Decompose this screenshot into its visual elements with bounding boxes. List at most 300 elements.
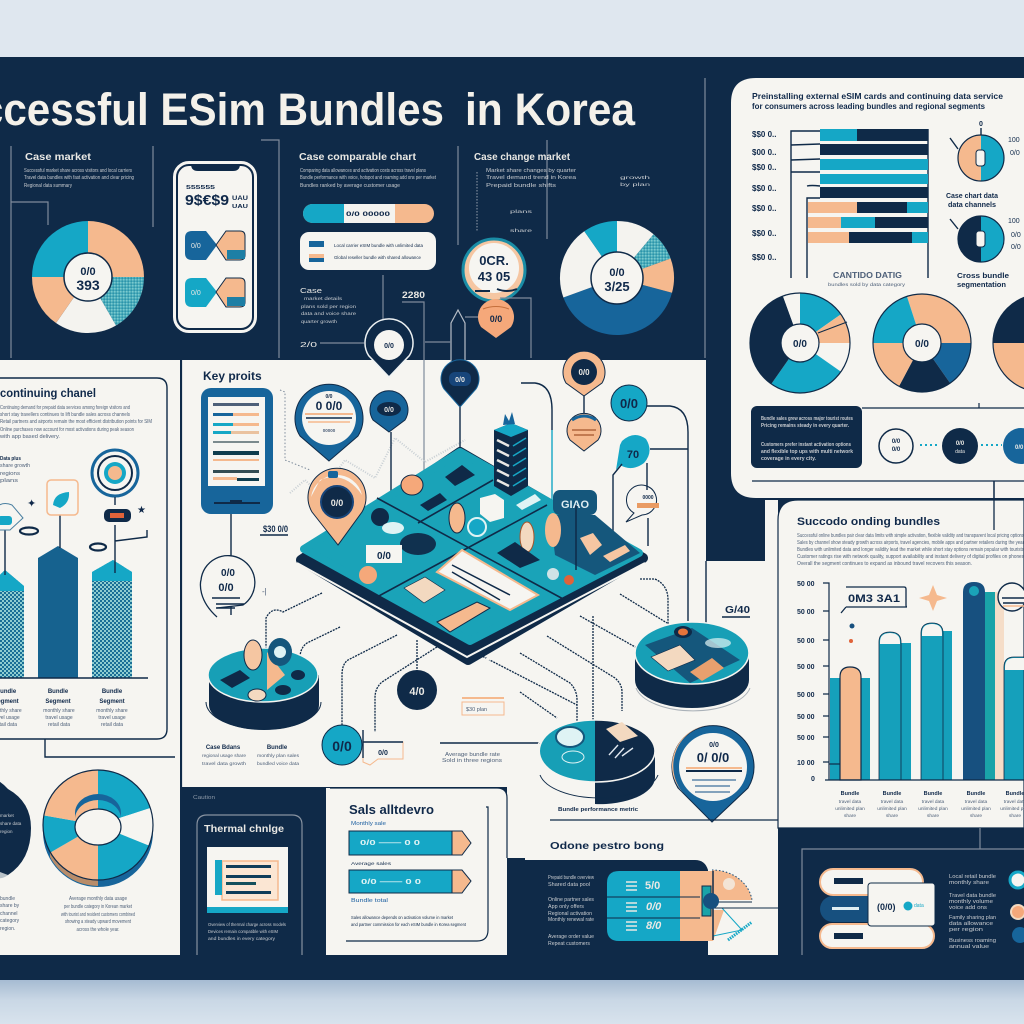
- thermal charge card: Devices remain compatible with eSIM: [208, 929, 278, 935]
- small pie: navy and teal: segmentation: [957, 282, 1006, 289]
- pin: bottom value: 0/0: [709, 742, 719, 749]
- heading: successful bundles: Succodo onding bundles: [797, 516, 940, 528]
- panel: sales allowance: and partner commission for each eSIM bundle in Korea segment: [351, 922, 467, 928]
- pin: peach badge: 0/0: [490, 314, 502, 324]
- bar chart: horizontal bundles: CANTIDO DATIG: [833, 271, 902, 280]
- lower right text: per region: [949, 927, 983, 933]
- disc: left: [206, 638, 321, 730]
- bar labels: Segment: [99, 699, 125, 705]
- lower right text: voice add ons: [949, 905, 988, 911]
- bar labels: travel data: [922, 799, 945, 805]
- pin: navy: [441, 360, 479, 407]
- panel: left column box: [0, 378, 167, 739]
- navy pricing block: Repeat customers: [548, 941, 591, 947]
- panel: sales allowance: Monthly sale: [351, 821, 386, 827]
- pie chart 2: 0/0: [915, 339, 929, 350]
- pin: key value: 0 0/0: [316, 399, 343, 413]
- phone mockup: UAU: [232, 204, 249, 210]
- panel: change market text: Travel demand trend in Korea: [486, 175, 577, 181]
- bar labels: unlimited plan: [835, 806, 865, 812]
- bar chart: bundles: 50 00: [797, 609, 815, 616]
- phone mockup: [174, 162, 256, 332]
- legend card: [300, 232, 436, 270]
- navy lower right outlined frame: [802, 828, 1024, 955]
- phone mockup: 9$€$9: [185, 192, 229, 209]
- caption left half: bundle: [0, 896, 15, 902]
- navy note box: Customers prefer instant activation options: [761, 442, 851, 448]
- progress pill: [303, 204, 434, 223]
- bar labels: Segment: [45, 699, 71, 705]
- pin: bottom value: [672, 725, 754, 822]
- panel: right lower bundles: [778, 500, 1024, 828]
- bar labels: [835, 791, 1024, 819]
- panel: sales allowance: 0/0 —— 0 0: [361, 879, 421, 886]
- bar labels: unlimited plan: [961, 806, 991, 812]
- pin: outline value: [200, 556, 267, 617]
- donut chart: change market: 3/25: [604, 279, 630, 294]
- caption left half: [0, 896, 20, 932]
- heading: continuing demand: Retail partners and airports remain the most efficient distribution points for SIM: [0, 419, 152, 425]
- labels under left disc: bundled voice data: [257, 761, 299, 767]
- panel: comparable chart text: [299, 152, 436, 189]
- panel: sales allowance: 0/0 —— 0 0: [360, 840, 420, 847]
- panel: change market text: by plan: [620, 182, 651, 187]
- panel: change market text: share: [510, 228, 533, 233]
- pin: key value: 00000: [323, 428, 336, 433]
- stacked plan pills: (0/0): [877, 902, 896, 912]
- vertical marker: [993, 481, 995, 530]
- bar chart: horizontal bundles: $$0 0..: [752, 229, 776, 238]
- price table: [607, 871, 719, 941]
- teal circle badge: 0/0: [620, 396, 638, 411]
- divider left centre: [180, 360, 182, 787]
- steps flow: 0/0: [956, 441, 965, 447]
- bubble callout: rate: 43 05: [478, 269, 510, 284]
- teal circle badge lower: 0/0: [332, 738, 352, 754]
- caption left half: category: [0, 918, 20, 924]
- speech bubble badge: [626, 485, 659, 522]
- navy pricing block: Average order value: [548, 934, 594, 940]
- bar labels: Bundle: [967, 791, 985, 797]
- bar labels: [0, 689, 128, 728]
- heading: successful bundles: [797, 516, 1024, 567]
- teal circle badge: [611, 385, 647, 421]
- label: 2280: 2280: [402, 290, 425, 300]
- stacked plan pills: data: [914, 903, 924, 909]
- bar labels: Bundle: [924, 791, 942, 797]
- note: case text: 2/0: [300, 342, 317, 349]
- lower right text: Local retail bundle: [949, 874, 996, 880]
- donut chart: change market: 0/0: [609, 267, 625, 279]
- bar chart: bundles: 50 00: [797, 735, 815, 742]
- top right heading: for consumers across leading bundles and regional segments: [752, 102, 986, 111]
- bar chart: horizontal bundles: $$0 0..: [752, 130, 776, 139]
- lower right text: [949, 874, 996, 950]
- left bottom half pie: market: [0, 813, 15, 818]
- caption left half: channel: [0, 911, 18, 917]
- labels under left disc: travel data growth: [202, 761, 246, 767]
- labels under left disc: Case Bdans: [206, 745, 241, 751]
- label: 0/0 underline: $30 0/0: [263, 524, 288, 534]
- note: case text: [300, 288, 364, 349]
- pie chart 1: 0/0: [793, 339, 807, 350]
- side note: regions: [0, 471, 21, 477]
- label: disc right value: [722, 605, 750, 617]
- lower panel rule: [550, 819, 778, 821]
- bubble callout: rate: [463, 239, 525, 301]
- small pie: peach and teal: data channels: [948, 202, 996, 209]
- note: mid caption: Bundle performance metric: [558, 807, 638, 813]
- faint trend line: [290, 438, 465, 495]
- note: case text: market details: [304, 296, 343, 301]
- panel: change market text: [474, 152, 651, 233]
- donut chart: change market: [560, 221, 674, 335]
- panel: case market text: Travel data bundles with fast activation and clear pricing: [24, 175, 134, 181]
- panel: top right charts: [731, 78, 1024, 498]
- donut chart: case market: 393: [76, 277, 100, 293]
- navy note box: Pricing remains steady in every quarter.: [761, 423, 850, 429]
- bar labels: Bundle: [883, 791, 901, 797]
- panel: sales allowance: Sales allowance depends on activation volume in market: [351, 915, 454, 921]
- side note: share growth: [0, 463, 30, 469]
- lower right text: monthly volume: [949, 899, 993, 905]
- caption donut: per bundle category in Korean market: [64, 904, 132, 910]
- pin: key value: 0/0: [326, 394, 333, 400]
- note: bundle lines: Sold in three regions: [442, 758, 503, 764]
- small pie: navy and teal: 0/0: [1011, 232, 1021, 239]
- bar labels: Bundle: [841, 791, 859, 797]
- pin: heart badge: [567, 413, 601, 451]
- pin: peach badge: [478, 299, 514, 338]
- steps flow: 0/0: [1015, 445, 1024, 451]
- navy pricing block: Online partner sales: [548, 897, 595, 903]
- navy pricing block: Prepaid bundle overview: [548, 875, 594, 881]
- bar chart: horizontal bundles: $$0 0..: [752, 184, 776, 193]
- bar labels: share: [970, 813, 982, 819]
- pin: dark badge: [365, 319, 413, 377]
- navy note box: and flexible top ups with multi network: [761, 449, 853, 455]
- pin: bottom value: 0/ 0/0: [697, 750, 729, 765]
- lower right text: data allowance: [949, 921, 993, 927]
- icon: star sparkle: [919, 585, 947, 611]
- teal bubble badge: 70: [627, 449, 639, 461]
- markers: [849, 624, 854, 643]
- note: case text: quarter growth: [301, 319, 338, 324]
- price table: 8/0: [646, 920, 662, 932]
- title: in Korea: [465, 84, 636, 135]
- legend card: Global reseller bundle with shared allowance: [334, 255, 421, 260]
- pin: orange over tablet: [308, 468, 366, 545]
- bar labels: travel data: [881, 799, 904, 805]
- steps flow: data: [955, 449, 965, 455]
- bar labels: unlimited plan: [877, 806, 907, 812]
- small pie: peach and teal: 100: [1008, 137, 1020, 144]
- side note: Data plus: [0, 456, 21, 462]
- right connectors: [231, 383, 706, 640]
- navy note box: Bundle sales grew across major tourist routes: [761, 416, 853, 422]
- small pie: navy and teal: Cross bundle: [957, 273, 1009, 280]
- small pie: peach and teal: 0: [979, 121, 983, 128]
- bar chart: bundles: 10 00: [797, 760, 815, 767]
- thermal charge card: [197, 815, 302, 955]
- navy pricing block: App only offers: [548, 904, 585, 910]
- steps flow: 0/0: [892, 439, 901, 445]
- price table: 5/0: [645, 880, 660, 892]
- panel: change market text: growth: [620, 175, 651, 180]
- connectors below tablet: [266, 579, 668, 760]
- navy note box: [751, 406, 862, 468]
- small pie: peach and teal: [946, 121, 1020, 209]
- panel: comparable chart text: Bundle performance with voice, hotspot and roaming add ons per market: [300, 175, 436, 181]
- icon: rocket outline: [425, 310, 481, 365]
- note: bundle lines: $30 plan: [466, 707, 487, 713]
- cream panel: left column: [0, 360, 180, 955]
- cream panel: sales block backing: [326, 788, 507, 955]
- bar labels: travel usage: [45, 715, 73, 721]
- hero: GIAO label: GIAO: [561, 499, 589, 511]
- bar chart: horizontal bundles: $00 0..: [752, 148, 776, 157]
- tablet: key points: [201, 388, 273, 514]
- panel: change market text: Case change market: [474, 152, 571, 163]
- note: bundle lines: Average bundle rate: [445, 752, 500, 758]
- panel: case market text: Case market: [25, 152, 92, 163]
- panel: comparable chart text: Comparing data allowances and activation costs across travel plans: [300, 168, 426, 174]
- pie chart 2: [873, 294, 971, 392]
- bar labels: monthly share: [96, 708, 128, 714]
- stacked plan pills: [820, 869, 935, 948]
- speech bubble badge: 0000: [642, 495, 654, 501]
- small pie: peach and teal: 0/0: [1010, 150, 1020, 157]
- panel: sales allowance: [326, 788, 507, 955]
- icons above left bars: ✦: [27, 498, 36, 510]
- tablet isometric hero: 0/0: [377, 551, 391, 562]
- navy pricing block: Monthly renewal rate: [548, 917, 594, 923]
- bar chart: bundles: 50 00: [797, 638, 815, 645]
- pin: outline value: 0/0: [218, 582, 234, 594]
- heading: continuing demand: short stay travellers continues to lift bundle sales across channels: [0, 412, 130, 418]
- lower right text: Family sharing plan: [949, 915, 996, 921]
- panel: sales allowance: Average sales: [351, 861, 392, 867]
- pie chart 3: [993, 294, 1024, 392]
- label card: 0/0: [378, 750, 388, 757]
- panel: change market text: plans: [510, 209, 534, 214]
- bar chart: horizontal bundles: $$0 0..: [752, 163, 776, 172]
- donut chart: case market: 0/0: [80, 266, 96, 278]
- bar labels: share: [927, 813, 939, 819]
- icons above left bars: [0, 450, 147, 575]
- small pie: navy and teal: 100: [1008, 218, 1020, 225]
- disc: middle: [537, 720, 658, 805]
- lower right text: annual value: [949, 944, 989, 950]
- cream panel: centre column: [182, 360, 778, 955]
- small pie: navy and teal: [950, 216, 1021, 289]
- panel: case market text: [24, 152, 134, 189]
- pin: orange with navy disc: [563, 351, 605, 396]
- bar labels: Bundle: [48, 689, 69, 695]
- top right heading: [752, 91, 1003, 111]
- bar labels: retail data: [101, 722, 123, 728]
- caption donut: Average monthly data usage: [69, 896, 127, 902]
- bar labels: travel data: [965, 799, 988, 805]
- lower right text: Travel data bundle: [949, 893, 996, 899]
- bar labels: retail data: [48, 722, 70, 728]
- phone mockup: UAU: [232, 196, 248, 202]
- callout: chart value: 0M3 3A1: [848, 593, 900, 605]
- bar labels: travel data: [839, 799, 862, 805]
- donut chart: case market: [32, 221, 144, 333]
- heading: continuing demand: [0, 386, 152, 440]
- panel: sales allowance: Sals alltdevro: [349, 802, 434, 817]
- heading: continuing demand: Continuing demand for prepaid data services among foreign visitors and: [0, 405, 130, 411]
- caption left half: share by: [0, 903, 20, 909]
- label: 0/0 underline: [260, 524, 288, 535]
- panel: case market text: Regional data summary: [24, 183, 72, 189]
- phone mockup: 0/0: [191, 290, 201, 297]
- note: case text: Case: [300, 288, 322, 295]
- label card: [363, 730, 403, 765]
- pin: blue small: [370, 391, 408, 432]
- bottom shadow band: [0, 980, 1024, 1024]
- bar labels: share: [1009, 813, 1021, 819]
- bar chart: bundles: 50 00: [797, 692, 815, 699]
- pin: navy: 0/0: [455, 377, 465, 384]
- thermal charge card: Thermal chnlge: [204, 824, 284, 835]
- lower right text: monthly share: [949, 880, 989, 886]
- phone mockup: 555555: [186, 185, 215, 191]
- navy pricing block: Regional activation: [548, 911, 592, 917]
- icons above left bars: ★: [137, 505, 146, 516]
- navy notch right of centre: [706, 490, 765, 561]
- small pie: peach and teal: Case chart data: [946, 193, 998, 200]
- dark circle badge: 4/0: [409, 686, 425, 698]
- heading: key points: Key proits: [203, 369, 262, 383]
- callout: chart value: [841, 587, 907, 613]
- fan icon: [712, 870, 778, 941]
- left bottom half pie: [0, 776, 31, 879]
- pin: outline value: -|: [262, 587, 267, 596]
- bar labels: unlimited plan: [918, 806, 948, 812]
- caption donut: showing a steady upward movement: [65, 919, 131, 925]
- bar chart: horizontal bundles: $$0 0..: [752, 253, 776, 262]
- navy note box: coverage in every city.: [761, 456, 817, 462]
- speech circle on chart: [998, 583, 1024, 611]
- bar chart: horizontal bundles: [752, 129, 928, 287]
- note: case text: plans sold per region: [301, 304, 357, 309]
- bottom edge rule: [0, 954, 1024, 956]
- tower: [494, 412, 528, 496]
- heading: continuing demand: Online purchases now account for most activations during peak season: [0, 427, 134, 433]
- bar chart: horizontal bundles: bundles sold by data category: [828, 282, 906, 287]
- pin: outline value: 0/0: [221, 568, 235, 579]
- side note: plans: [0, 478, 19, 484]
- teal bubble badge: [613, 435, 650, 545]
- bar chart: bundles: 50 00: [797, 581, 815, 588]
- phone mockup: 0/0: [191, 243, 201, 250]
- label: 2280: [402, 290, 425, 480]
- top right heading: Preinstalling external eSIM cards and continuing data service: [752, 91, 1003, 101]
- bar chart: bundles: 0: [811, 776, 815, 783]
- panel: sales allowance: Bundle total: [351, 898, 388, 904]
- bar chart: bundles: 50 00: [797, 714, 815, 721]
- heading: successful bundles: Overall the segment continues to expand as inbound travel recovers this season.: [797, 561, 972, 567]
- lower right icons: [1010, 872, 1024, 943]
- pin: dark badge: 0/0: [384, 343, 394, 350]
- pin: orange over tablet: 0/0: [331, 498, 343, 508]
- note: bundle lines: [440, 697, 540, 764]
- connector below left panel: [45, 739, 175, 757]
- tablet isometric hero: [297, 452, 645, 660]
- left bottom half pie: share data: [0, 821, 22, 826]
- thermal charge card: Overview of thermal charge across models: [208, 922, 287, 928]
- heading: continuing demand: with app based delivery.: [0, 434, 60, 440]
- panel: navy thermal charge: [182, 787, 326, 955]
- hero: GIAO label: [553, 490, 597, 515]
- teal circle badge lower: [322, 725, 362, 765]
- pin: key value: [295, 384, 363, 461]
- connector from bubble: [500, 298, 531, 358]
- label: disc right value: G/40: [725, 605, 750, 616]
- pie chart 1: [750, 293, 850, 393]
- small caption: Caution: [193, 795, 215, 801]
- legend card: Local carrier eSIM bundle with unlimited data: [334, 243, 423, 248]
- caption donut: with tourist and resident customers combined: [61, 912, 135, 918]
- pin: blue small: 0/0: [384, 407, 394, 414]
- panel: change market text: Prepaid bundle shifts: [486, 183, 556, 189]
- steps flow: [752, 403, 1024, 530]
- price table: 0/0: [646, 901, 662, 913]
- bar labels: Bundle: [102, 689, 123, 695]
- small pie: navy and teal: 0/0: [1011, 244, 1021, 251]
- panel: comparable chart text: Case comparable chart: [299, 152, 417, 163]
- bar labels: share: [844, 813, 856, 819]
- caption donut: [61, 896, 135, 933]
- navy pricing block: [525, 860, 708, 955]
- bar chart: bundles: [797, 581, 1024, 783]
- connector: tablet to pin: [230, 514, 232, 556]
- labels under left disc: monthly plan sales: [257, 753, 300, 759]
- heading: continuing demand: continuing chanel: [0, 386, 96, 400]
- caption donut: across the whole year.: [76, 927, 120, 933]
- panel: change market text: Market share changes by quarter: [486, 168, 576, 174]
- pin: orange with navy disc: 0/0: [578, 368, 590, 377]
- bar labels: Bundle: [1006, 791, 1024, 797]
- panel: case market text: Successful market share across visitors and local carriers: [24, 168, 132, 174]
- dark circle badge: [397, 670, 437, 710]
- side note: [0, 456, 30, 484]
- disc: right: [635, 622, 750, 711]
- bubble callout: rate: 0CR.: [479, 253, 509, 268]
- donut 3d chart: [43, 770, 153, 887]
- labels under left disc: regional usage share: [202, 753, 246, 759]
- navy pricing block: Shared data pool: [548, 882, 590, 888]
- lower right text: Business roaming: [949, 938, 996, 944]
- note: case text: data and voice share: [301, 311, 357, 316]
- heading: online pricing: Odone pestro bong: [550, 841, 664, 852]
- labels under left disc: Bundle: [267, 745, 288, 751]
- caption left half: region.: [0, 926, 15, 932]
- panel: comparable chart text: Bundles ranked by average customer usage: [300, 183, 400, 189]
- dotted link from tablet: [280, 390, 310, 470]
- bar labels: monthly share: [43, 708, 75, 714]
- bar labels: travel usage: [98, 715, 126, 721]
- bar labels: share: [886, 813, 898, 819]
- left bottom half pie: region: [0, 829, 13, 834]
- thermal charge card: and bundles in every category: [208, 936, 276, 942]
- top navy section rules: [11, 78, 705, 358]
- progress pill: 0/0 00000: [346, 212, 391, 218]
- bar chart: left column: [0, 546, 148, 678]
- hero: white message card: [437, 550, 538, 610]
